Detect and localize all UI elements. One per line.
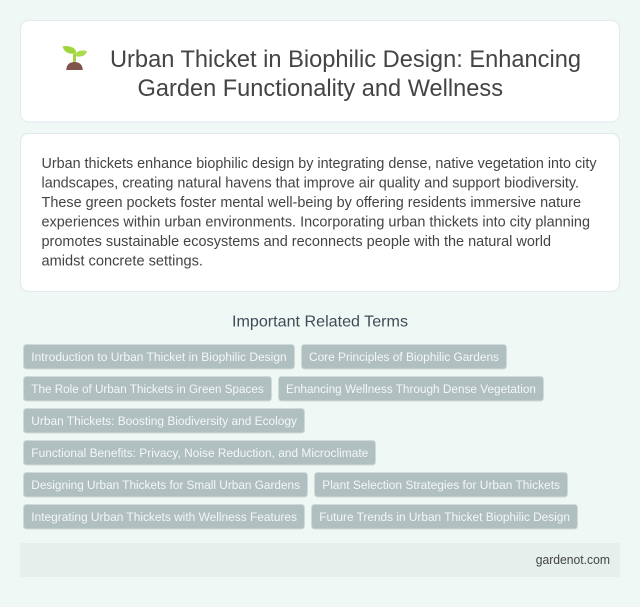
tag: Urban Thickets: Boosting Biodiversity and Ecology — [31, 414, 298, 428]
tag — [24, 408, 304, 433]
tag — [24, 376, 272, 401]
tag — [278, 376, 544, 401]
tag — [24, 344, 294, 369]
panel: description — [20, 134, 620, 292]
title — [110, 46, 581, 102]
tag — [24, 472, 308, 497]
title: Garden Functionality and Wellness — [138, 75, 503, 102]
tag — [312, 504, 578, 529]
title: Urban Thicket in Biophilic Design: Enhancing — [110, 46, 581, 73]
text block: description paragraph: landscapes, creating natural havens that improve air quality and support biodiversity. — [42, 176, 579, 192]
tag: Enhancing Wellness Through Dense Vegetation — [286, 382, 536, 396]
tag — [24, 440, 376, 465]
tag: Core Principles of Biophilic Gardens — [309, 350, 499, 364]
panel: title card — [20, 20, 620, 122]
tag list: related terms — [24, 344, 578, 529]
tag: The Role of Urban Thickets in Green Spaces — [31, 382, 264, 396]
tag: Integrating Urban Thickets with Wellness Features — [31, 510, 297, 524]
tag — [314, 472, 568, 497]
tag: Introduction to Urban Thicket in Biophilic Design — [31, 350, 287, 364]
text block: description paragraph: promotes sustainable ecosystems and reconnects people with the natural world — [42, 234, 551, 250]
tag: Future Trends in Urban Thicket Biophilic Design — [319, 510, 570, 524]
footer — [20, 543, 620, 577]
text block: description paragraph: These green pockets foster mental well-being by offering residents immersive nature — [42, 195, 581, 211]
text block: description paragraph: Urban thickets enhance biophilic design by integrating dense, native vegetation into city — [42, 156, 597, 172]
tag — [302, 344, 506, 369]
text block: description paragraph — [42, 156, 597, 270]
text block: description paragraph: experiences within urban environments. Incorporating urban thickets into city planning — [42, 214, 590, 230]
text block: description paragraph: amidst concrete settings. — [42, 254, 203, 270]
heading: related terms: Important Related Terms — [232, 314, 408, 330]
footer: source: gardenot.com — [536, 552, 610, 567]
tag: Designing Urban Thickets for Small Urban Gardens — [31, 478, 300, 492]
tag — [24, 504, 304, 529]
icon: seedling — [63, 46, 87, 70]
tag: Plant Selection Strategies for Urban Thickets — [322, 478, 560, 492]
tag: Functional Benefits: Privacy, Noise Reduction, and Microclimate — [31, 446, 368, 460]
